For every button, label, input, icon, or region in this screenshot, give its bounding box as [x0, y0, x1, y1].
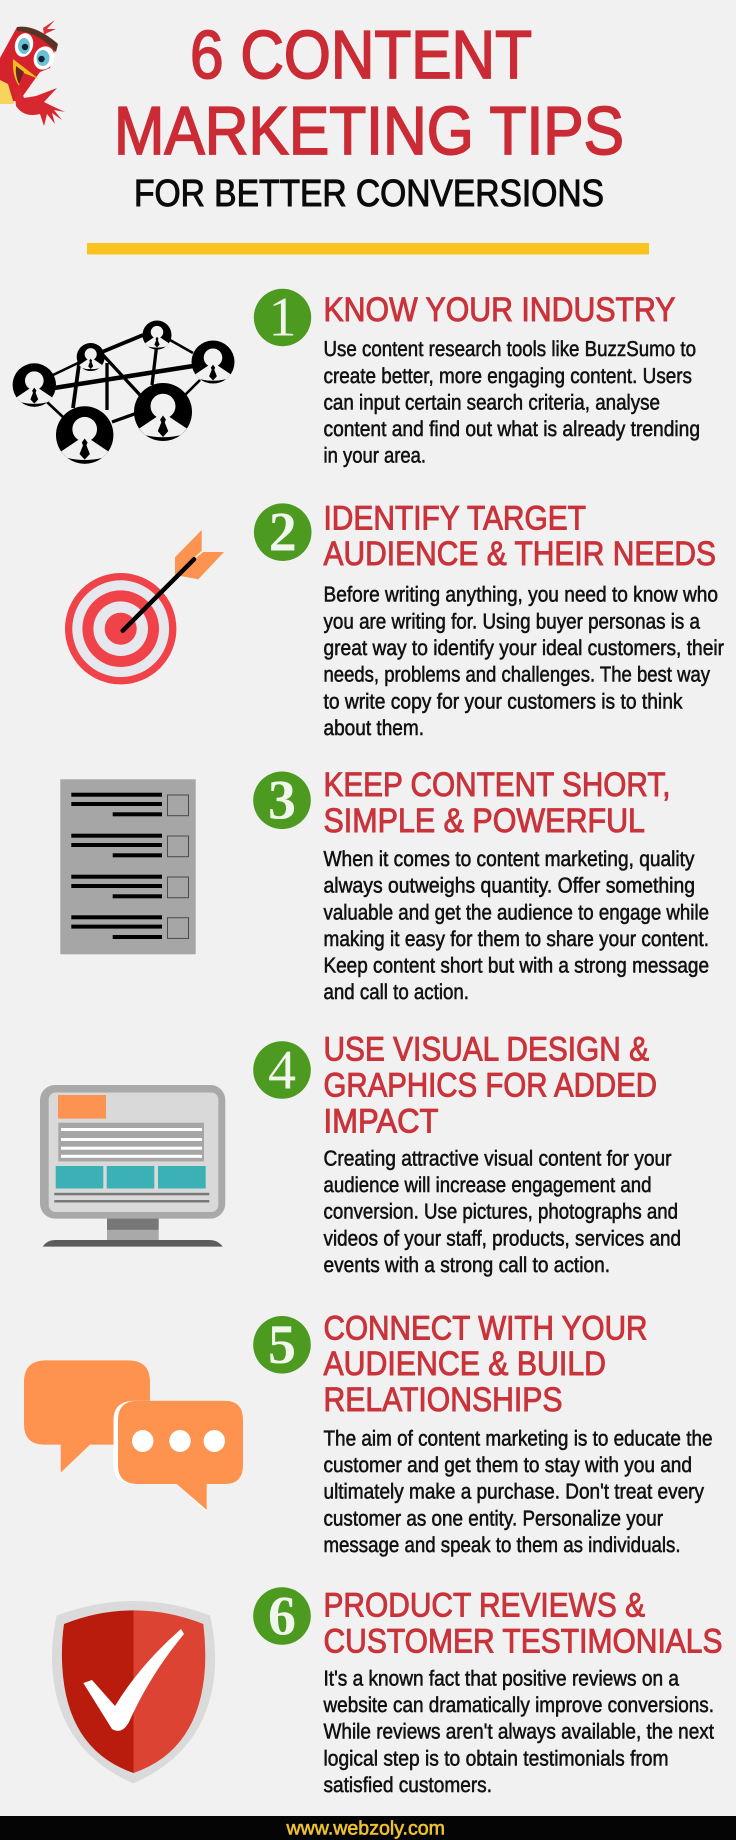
- number badge 2: [254, 502, 312, 564]
- heading: KEEP CONTENT SHORT,: [324, 766, 670, 804]
- body text: Creating attractive visual content for your: [324, 1146, 672, 1170]
- number badge 3: [253, 770, 311, 832]
- heading: [324, 766, 670, 840]
- body text: audience will increase engagement and: [324, 1173, 652, 1197]
- body text: When it comes to content marketing, quality: [324, 847, 695, 871]
- body text: logical step is to obtain testimonials from: [324, 1746, 668, 1770]
- number badge 6: [253, 1586, 311, 1648]
- footer bar: [0, 1816, 736, 1840]
- body text: in your area.: [324, 444, 426, 468]
- panel: tip 5: [24, 1309, 712, 1557]
- body text: events with a strong call to action.: [324, 1253, 610, 1277]
- number badge 1: [254, 286, 311, 348]
- icon: shield with check mark: [52, 1601, 215, 1783]
- heading: GRAPHICS FOR ADDED: [324, 1067, 657, 1105]
- body text: customer as one entity. Personalize your: [324, 1506, 663, 1530]
- yellow divider bar: [87, 243, 649, 254]
- icon: people network: [13, 320, 234, 464]
- body text: conversion. Use pictures, photographs and: [324, 1200, 678, 1224]
- body text: customer and get them to stay with you and: [324, 1453, 692, 1477]
- panel: tip 3: [60, 766, 709, 1004]
- body text: can input certain search criteria, analyse: [324, 390, 660, 414]
- subtitle: FOR BETTER CONVERSIONS: [134, 173, 604, 215]
- footer url: www.webzoly.com: [285, 1817, 445, 1839]
- panel: tip 1: [13, 286, 700, 468]
- panel: tip 4: [40, 1031, 681, 1277]
- body text: content and find out what is already trending: [324, 417, 700, 441]
- number badge 4: [253, 1040, 311, 1102]
- number badge 5: [253, 1314, 311, 1376]
- body text: [324, 1146, 681, 1277]
- icon: desktop monitor: [40, 1085, 225, 1247]
- number badge 4: 4: [268, 1040, 296, 1102]
- body text: [324, 847, 709, 1004]
- heading: [324, 1031, 657, 1141]
- heading: [324, 1587, 722, 1661]
- body text: [324, 583, 724, 740]
- title: [114, 17, 624, 215]
- heading: [324, 499, 716, 573]
- heading: [324, 1309, 648, 1419]
- heading: USE VISUAL DESIGN &: [324, 1031, 649, 1069]
- number badge 5: 5: [268, 1314, 296, 1376]
- number badge 3: 3: [268, 770, 296, 832]
- heading: IMPACT: [324, 1103, 438, 1141]
- body text: [324, 1426, 712, 1557]
- body text: satisfied customers.: [324, 1773, 492, 1797]
- body text: about them.: [324, 716, 424, 740]
- body text: always outweighs quantity. Offer something: [324, 874, 695, 898]
- heading: CONNECT WITH YOUR: [324, 1309, 648, 1347]
- title: 6 CONTENT: [190, 17, 532, 93]
- body text: and call to action.: [324, 980, 469, 1004]
- icon: checklist: [60, 779, 196, 954]
- heading: AUDIENCE & BUILD: [324, 1345, 606, 1383]
- panel: tip 2: [65, 499, 724, 740]
- number badge 1: 1: [268, 286, 296, 348]
- heading: SIMPLE & POWERFUL: [324, 802, 645, 840]
- body text: videos of your staff, products, services and: [324, 1226, 681, 1250]
- heading: IDENTIFY TARGET: [324, 499, 586, 537]
- panel: tip 6: [52, 1586, 722, 1797]
- body text: to write copy for your customers is to think: [324, 689, 683, 713]
- body text: [323, 1666, 714, 1797]
- body text: create better, more engaging content. Users: [324, 364, 692, 388]
- number badge 6: 6: [268, 1586, 296, 1648]
- body text: [324, 337, 700, 468]
- title: MARKETING TIPS: [114, 93, 624, 169]
- body text: It's a known fact that positive reviews on a: [324, 1666, 679, 1690]
- heading: RELATIONSHIPS: [324, 1381, 562, 1419]
- heading: PRODUCT REVIEWS &: [324, 1587, 645, 1625]
- number badge 2: 2: [269, 502, 297, 564]
- body text: message and speak to them as individuals.: [324, 1533, 680, 1557]
- icon: target with arrow: [65, 530, 224, 684]
- icon: speech bubbles: [24, 1360, 243, 1512]
- icon: red bird mascot: [0, 20, 65, 126]
- heading: KNOW YOUR INDUSTRY: [324, 291, 676, 329]
